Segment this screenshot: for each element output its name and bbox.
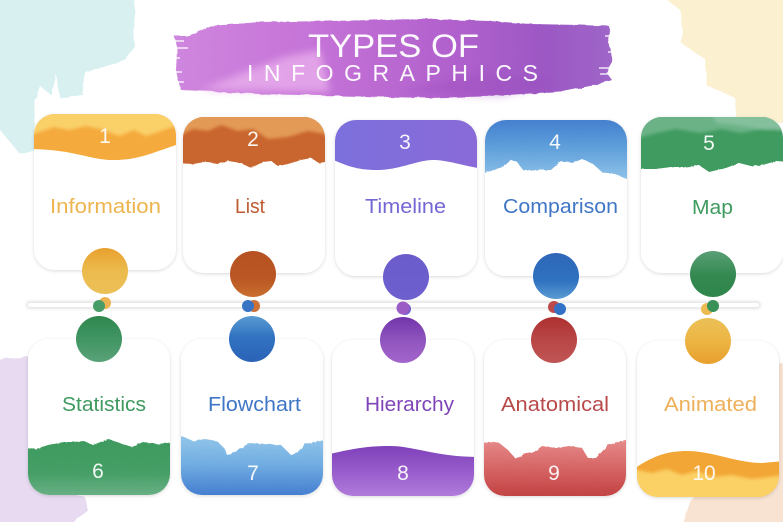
connector 2: List to Flowchart	[229, 251, 276, 362]
connector 5: Map to Animated	[685, 251, 736, 364]
label: Flowchart	[208, 394, 301, 416]
watercolor band	[485, 120, 627, 179]
number: 6	[92, 460, 104, 483]
label: List	[235, 196, 265, 218]
connector 1: Information to Statistics	[76, 248, 128, 362]
node	[533, 253, 579, 299]
node	[383, 254, 429, 300]
brush stroke	[174, 19, 612, 98]
number: 7	[247, 462, 259, 485]
watercolor band	[34, 114, 176, 160]
card 6: Statistics	[22, 339, 176, 501]
node	[380, 317, 426, 363]
watercolor band	[637, 451, 779, 497]
brush highlight	[200, 50, 330, 92]
number: 2	[247, 128, 259, 151]
title line 2: INFOGRAPHICS	[247, 60, 538, 86]
number: 1	[99, 125, 111, 148]
label: Hierarchy	[365, 394, 454, 416]
timeline line	[26, 301, 761, 309]
number: 4	[549, 131, 561, 154]
connector 4: Comparison to Anatomical	[531, 253, 579, 363]
background splash: teal	[0, 0, 136, 154]
card 1: Information	[28, 108, 182, 270]
watercolor band	[332, 446, 474, 496]
small dot	[248, 300, 260, 312]
label: Map	[692, 197, 733, 219]
watercolor band	[335, 120, 477, 170]
small dot	[554, 303, 566, 315]
node	[82, 248, 128, 294]
node	[76, 316, 122, 362]
brush dark wash	[400, 72, 560, 97]
brush fray: left	[174, 41, 188, 82]
background splash: peach	[678, 360, 783, 522]
card 3: Timeline	[329, 114, 483, 276]
light wash	[637, 468, 779, 497]
card 5: Map	[635, 111, 783, 273]
watercolor band	[484, 440, 626, 496]
node	[531, 317, 577, 363]
connector 3: Timeline to Hierarchy	[380, 254, 429, 363]
small dot	[99, 297, 111, 309]
card 8: Hierarchy	[326, 340, 480, 502]
light wash	[641, 117, 782, 138]
title line 1: TYPES OF	[308, 28, 479, 64]
node	[230, 251, 276, 297]
light wash	[183, 117, 325, 140]
card 9: Anatomical	[478, 340, 632, 502]
label: Timeline	[365, 196, 446, 218]
watercolor band	[28, 439, 170, 495]
node	[685, 318, 731, 364]
brush fray: right	[599, 36, 614, 74]
node	[690, 251, 736, 297]
card 7: Flowchart	[175, 339, 329, 501]
node	[229, 316, 275, 362]
small dot	[399, 303, 411, 315]
title banner	[174, 19, 614, 98]
number: 5	[703, 132, 715, 155]
watercolor band	[641, 117, 783, 172]
number: 3	[399, 131, 411, 154]
label: Animated	[664, 394, 757, 416]
label: Anatomical	[501, 394, 609, 416]
small dot	[701, 303, 713, 315]
background splash: lilac	[0, 355, 88, 522]
watercolor band	[183, 117, 325, 168]
label: Statistics	[62, 394, 146, 416]
background splash: yellow	[660, 0, 783, 125]
card 10: Animated	[631, 341, 783, 503]
line shadow	[26, 301, 761, 309]
light wash	[34, 114, 174, 137]
number: 8	[397, 462, 409, 485]
small dot	[396, 302, 410, 314]
small dot	[548, 301, 560, 313]
small dot	[93, 300, 105, 312]
label: Information	[50, 196, 161, 218]
card 4: Comparison	[479, 114, 633, 276]
small dot	[707, 300, 719, 312]
watercolor band	[181, 436, 323, 495]
light wash corner	[713, 117, 781, 130]
small dot	[242, 300, 254, 312]
number: 10	[692, 462, 716, 485]
card 2: List	[177, 111, 331, 273]
label: Comparison	[503, 196, 618, 218]
number: 9	[548, 462, 560, 485]
line body	[28, 303, 759, 307]
